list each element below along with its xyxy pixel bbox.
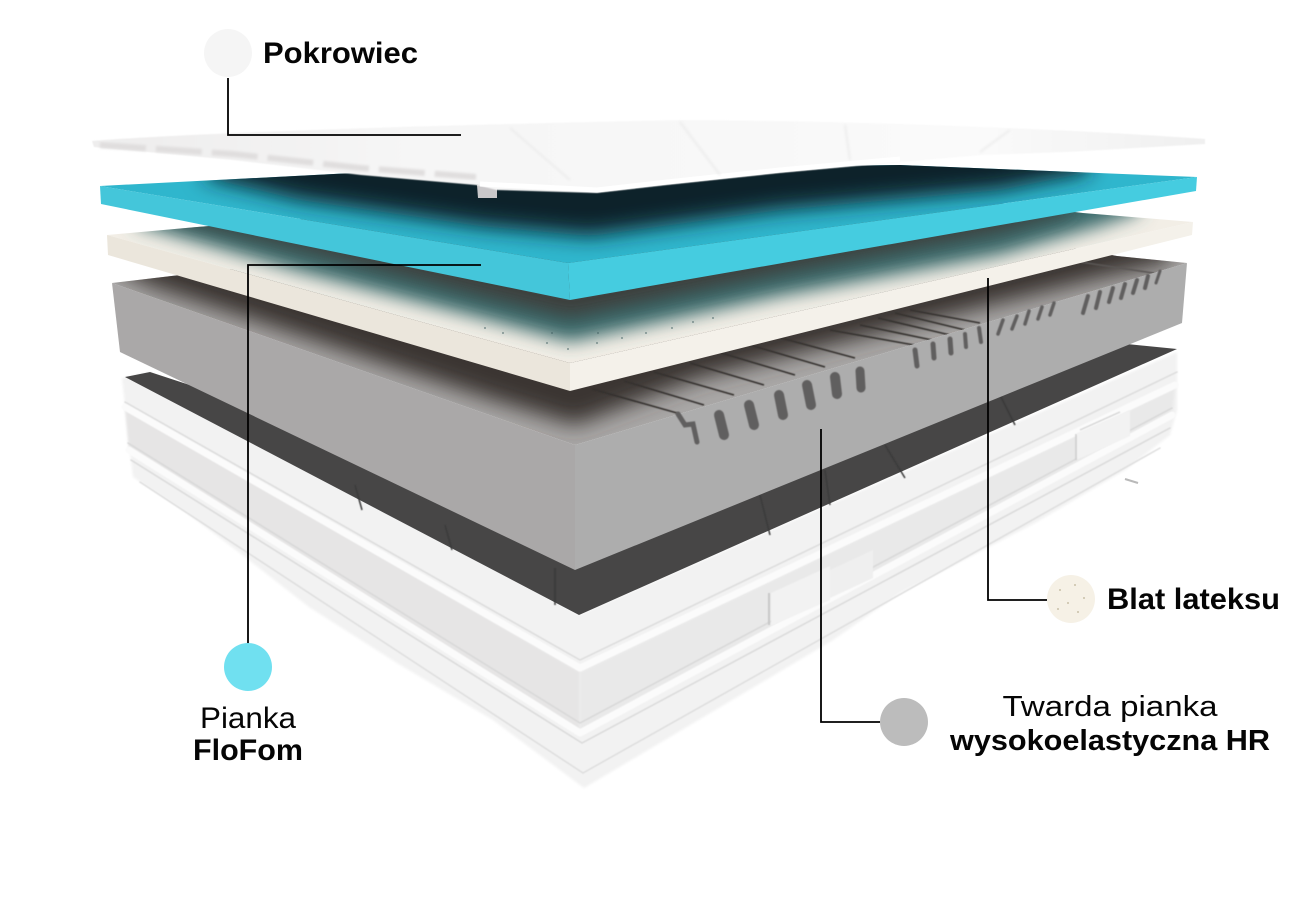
- label: Pianka FloFom: FloFom: [193, 734, 303, 767]
- foam top surface: [112, 200, 1187, 445]
- foam right face: [575, 263, 1187, 570]
- latex layer: [107, 204, 1193, 391]
- handles: [769, 410, 1130, 626]
- teal top surface: [100, 165, 1197, 263]
- cover stitched edge: [100, 145, 476, 177]
- small fabric mark: [1125, 479, 1138, 483]
- dark base layer: [125, 343, 1177, 615]
- base mattress: [122, 352, 1177, 788]
- panel seams: [355, 395, 1015, 605]
- leader line: Pokrowiec: [228, 78, 461, 135]
- shadow on teal top: [192, 165, 1103, 253]
- teal right face: [568, 177, 1197, 300]
- gray HR foam layer: [112, 248, 1187, 570]
- grooves on top: [592, 262, 1160, 413]
- latex right face: [570, 222, 1193, 391]
- front-edge slots: [678, 271, 1160, 442]
- icon: FloFom swatch: [224, 643, 272, 691]
- label: Twarda pianka wysokoelastyczna HR: wysokoelastyczna HR: [949, 725, 1270, 757]
- shadow on latex top: [128, 204, 1150, 356]
- cover shape: [92, 120, 1205, 193]
- leader line: Pianka FloFom: [248, 265, 481, 645]
- latex pores: [484, 317, 714, 350]
- label: Twarda pianka wysokoelastyczna HR: [949, 691, 1270, 757]
- teal left face: [100, 186, 570, 300]
- right grey panel: [580, 388, 1175, 730]
- icon: latex swatch: [1047, 575, 1095, 623]
- label: Pianka FloFom: [193, 702, 303, 767]
- label: Blat lateksu: Blat lateksu: [1107, 583, 1280, 616]
- infographic: mattress layers: [92, 29, 1278, 787]
- cover tag: [477, 185, 497, 198]
- label: Twarda pianka wysokoelastyczna HR: Twarda pianka: [1002, 691, 1218, 723]
- teal FloFom layer: [100, 165, 1197, 300]
- cover white piping: [480, 159, 900, 190]
- foam left face: [112, 283, 575, 570]
- leader line: Blat lateksu: [988, 278, 1047, 600]
- label: Pokrowiec: Pokrowiec: [263, 37, 418, 70]
- mattress body: [122, 352, 1177, 788]
- latex top surface: [107, 180, 1193, 363]
- cover quilting: [510, 122, 1010, 180]
- latex left face: [107, 235, 570, 391]
- icon: HR foam swatch: [880, 698, 928, 746]
- label: Pianka FloFom: Pianka: [200, 702, 296, 735]
- icon: cover swatch: [204, 29, 252, 77]
- leader line: Twarda pianka: [821, 429, 880, 722]
- left grey panel: [125, 407, 580, 730]
- shadow on foam top: [113, 248, 1184, 440]
- piping seams: [125, 372, 1177, 773]
- cover layer: [92, 120, 1205, 198]
